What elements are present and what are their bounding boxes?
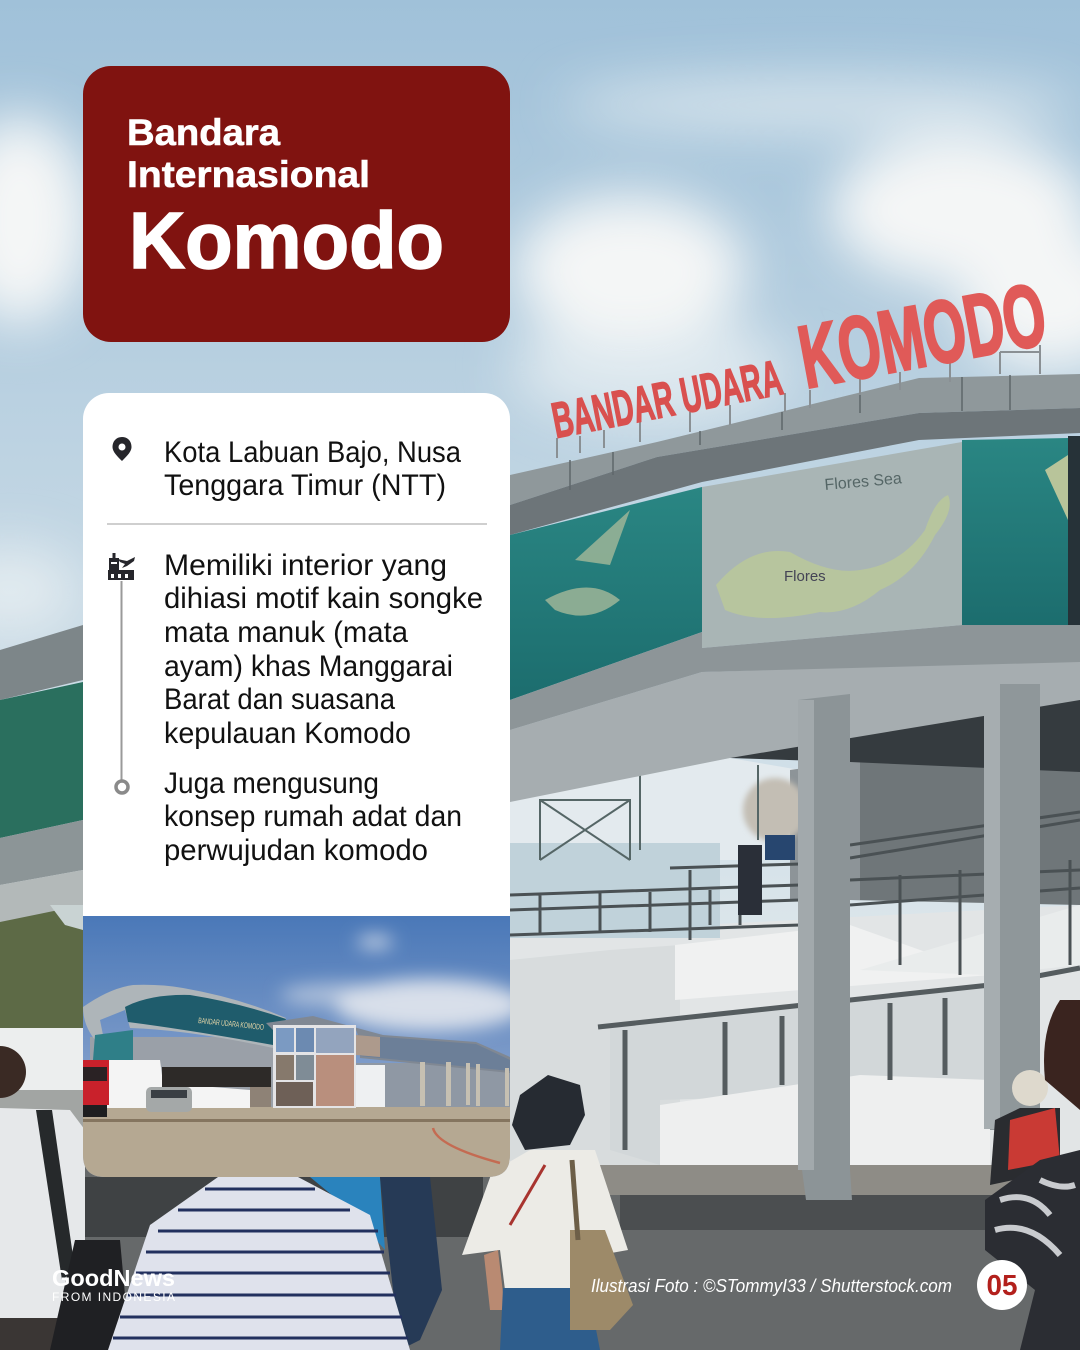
title: Bandara Internasional: Internasional (127, 154, 370, 195)
title: Komodo: Komodo (129, 196, 444, 285)
van (146, 1087, 192, 1112)
sky with clouds (0, 0, 1080, 1000)
logo: GoodNews from Indonesia: GoodNews (52, 1265, 175, 1291)
people in foreground (0, 1000, 1080, 1350)
ground (83, 1106, 510, 1177)
text: interior motif: ayam) khas Manggarai (164, 650, 453, 683)
left terminal wing (0, 625, 83, 1190)
text: interior motif: dihiasi motif kain songke (164, 582, 483, 615)
photo: Komodo airport terminal (83, 916, 525, 1177)
text: interior motif: kepulauan Komodo (164, 717, 411, 750)
panel: airport facts (83, 393, 510, 953)
icon: location pin (112, 437, 132, 461)
page number badge: 05 (986, 1270, 1018, 1302)
text: location: Tenggara Timur (NTT) (164, 469, 446, 502)
page number badge (977, 1260, 1027, 1310)
rooftop sign: BANDAR UDARA (547, 349, 787, 449)
glass lobby and mural bridge (266, 1016, 510, 1108)
title panel (83, 66, 510, 342)
icon: airport tower and plane (108, 553, 135, 580)
lower fascia (510, 625, 1080, 730)
text: location: Kota Labuan Bajo, Nusa (164, 436, 461, 469)
person: blue shirt (310, 1177, 442, 1350)
text: location (164, 436, 461, 502)
rooftop sign (547, 264, 1053, 458)
timeline connector (116, 581, 128, 793)
text: concept: perwujudan komodo (164, 834, 428, 867)
logo: GoodNews from Indonesia (52, 1265, 175, 1304)
title: Bandara Internasional: Bandara (127, 112, 280, 153)
sky gap under canopy and hoarding (510, 758, 1080, 975)
text: concept: konsep rumah adat dan (164, 800, 462, 833)
logo: GoodNews from Indonesia: FROM INDONESIA (52, 1290, 175, 1304)
text: concept (164, 767, 462, 867)
lower white walls (510, 905, 1080, 1165)
ground (0, 1165, 1080, 1350)
person: woman in white blouse (462, 1075, 633, 1350)
photo credit: Ilustrasi Foto : ©STommyI33 / Shutterstock.com (591, 1276, 952, 1296)
mural teal panels (510, 487, 702, 700)
people: right group (985, 1000, 1080, 1350)
person: striped shirt man (108, 1177, 410, 1350)
text: interior motif: mata manuk (mata (164, 616, 408, 649)
fire truck (83, 1060, 109, 1117)
mural map panel (702, 442, 962, 648)
terminal building: BANDAR UDARA KOMODO (198, 1016, 264, 1032)
terminal building (83, 985, 286, 1108)
person: left man (0, 1046, 130, 1350)
text: interior motif (164, 549, 483, 750)
text: interior motif: Memiliki interior yang (164, 549, 447, 582)
columns (798, 684, 1040, 1200)
text: concept: Juga mengusung (164, 767, 379, 800)
canopy underside (510, 660, 1080, 802)
title: Bandara Internasional (127, 112, 370, 195)
upper terminal facade: Flores (784, 568, 826, 585)
upper terminal facade (510, 374, 1080, 730)
text: interior motif: Barat dan suasana (164, 683, 395, 716)
upper terminal facade: Flores Sea (824, 470, 903, 494)
